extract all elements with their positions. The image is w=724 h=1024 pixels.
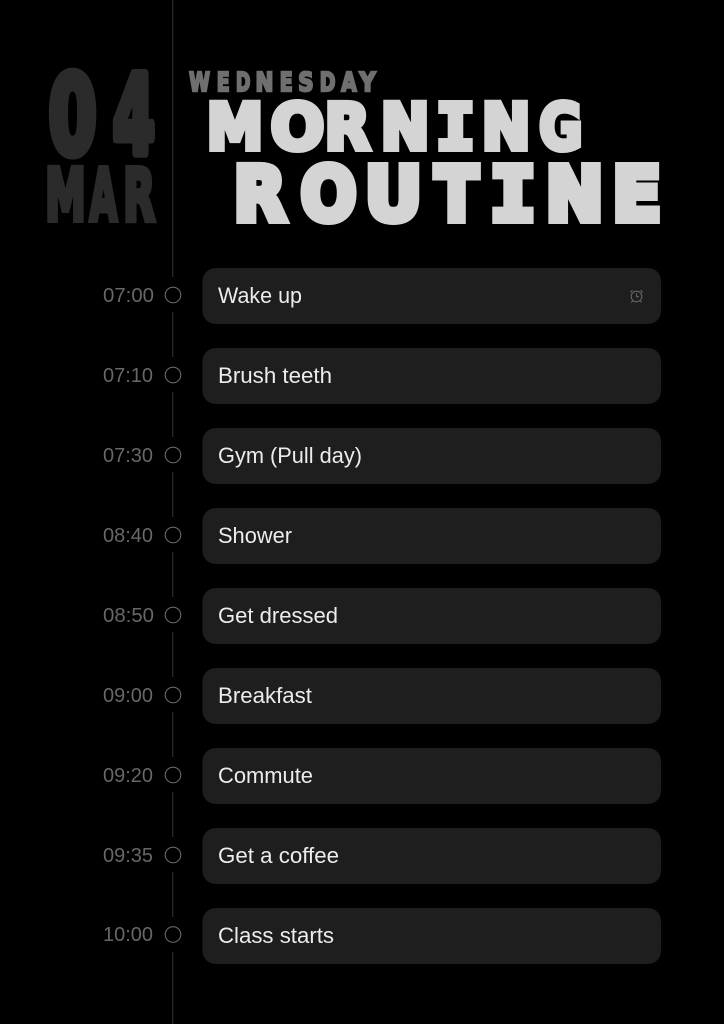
- weekday: E: [280, 68, 293, 98]
- row: Get dressed: Get dressed: [218, 603, 338, 628]
- row: Brush teeth: 07:10: [103, 365, 153, 387]
- row: Shower: Shower: [218, 523, 292, 548]
- row: Class starts: 10:00: [103, 924, 153, 946]
- row: Commute: 09:20: [103, 765, 153, 787]
- title line one: O: [271, 91, 324, 164]
- row: Brush teeth: Brush teeth: [218, 363, 332, 388]
- row: Shower: 08:40: [103, 525, 153, 547]
- row: Shower: [103, 508, 661, 564]
- title line two: N: [546, 152, 603, 238]
- row: Commute: Commute: [218, 763, 313, 788]
- row: Breakfast: Breakfast: [218, 683, 312, 708]
- weekday: W: [189, 68, 210, 98]
- title line one: [207, 91, 583, 164]
- row: Wake up: [103, 268, 661, 324]
- row: Get a coffee: Get a coffee: [218, 843, 339, 868]
- row: Class starts: [103, 908, 661, 964]
- row: Brush teeth: [103, 348, 661, 404]
- title line one: I: [436, 91, 475, 164]
- row: Breakfast: [103, 668, 661, 724]
- row: Commute: [103, 748, 661, 804]
- row: Class starts: Class starts: [218, 923, 334, 948]
- row: Get dressed: [103, 588, 661, 644]
- month: [45, 154, 155, 237]
- weekday: [189, 68, 376, 98]
- title line one: M: [207, 91, 263, 164]
- month: R: [123, 154, 155, 237]
- day number: 0: [49, 54, 96, 179]
- month: M: [45, 154, 86, 237]
- title line two: [234, 152, 661, 238]
- row: Breakfast: 09:00: [103, 685, 153, 707]
- title line two: U: [365, 152, 422, 238]
- title block: [189, 68, 661, 238]
- weekday: D: [236, 68, 250, 98]
- title line two: T: [435, 152, 478, 238]
- icon: alarm clock: [630, 290, 643, 302]
- title line one: N: [482, 91, 530, 164]
- month: A: [90, 154, 117, 237]
- title line two: E: [612, 152, 661, 238]
- timeline line: [172, 0, 174, 1024]
- date block: [45, 54, 155, 237]
- weekday: E: [217, 68, 230, 98]
- weekday: S: [298, 68, 314, 98]
- row: Wake up: Wake up: [218, 283, 302, 308]
- day number: 4: [113, 54, 155, 179]
- row: Gym: Gym (Pull day): [218, 443, 362, 468]
- weekday: Y: [359, 68, 376, 98]
- row: Get a coffee: 09:35: [103, 845, 153, 867]
- weekday: D: [320, 68, 336, 98]
- title line two: I: [490, 152, 536, 238]
- row: Gym: 07:30: [103, 445, 153, 467]
- title line one: R: [325, 91, 370, 164]
- row: Gym: [103, 428, 661, 484]
- title line one: N: [381, 91, 429, 164]
- row: Wake up: 07:00: [103, 285, 154, 307]
- title line one: G: [539, 91, 582, 164]
- row: Get dressed: 08:50: [103, 605, 154, 627]
- weekday: A: [341, 68, 357, 98]
- row: Get a coffee: [103, 828, 661, 884]
- title line two: R: [234, 152, 286, 238]
- title line two: O: [301, 152, 356, 238]
- weekday: N: [256, 68, 273, 98]
